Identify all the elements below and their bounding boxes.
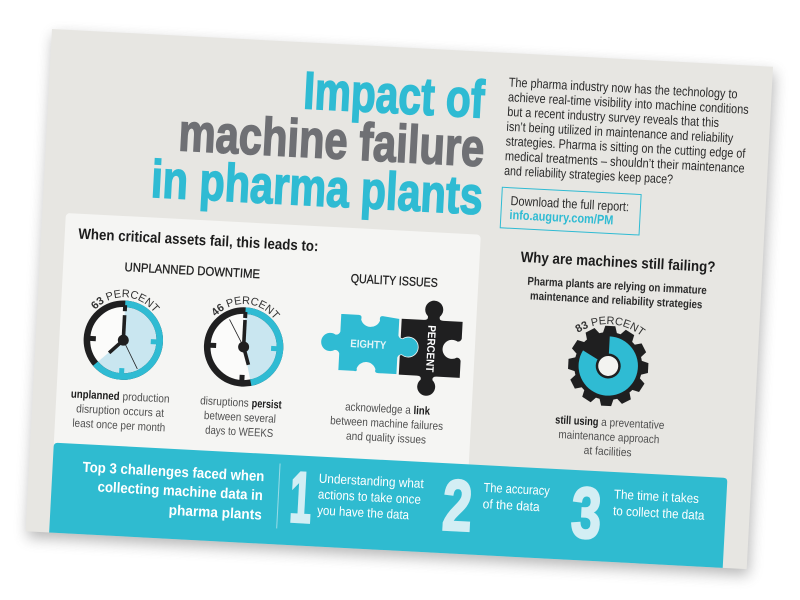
- challenge 1: actions to take once: [318, 487, 421, 507]
- caption: 46 percent: days to WEEKS: [205, 425, 274, 440]
- subheading: immature strategies: Pharma plants are relying on immature: [527, 276, 707, 297]
- challenges heading: collecting machine data in: [97, 480, 263, 504]
- panel: top 3 challenges: [49, 443, 727, 568]
- label: 63 percent: 63 PERCENT: [91, 290, 160, 311]
- caption: 63 percent: unplanned: [71, 388, 120, 403]
- challenges heading: [80, 460, 265, 524]
- intro paragraph: and reliability strategies keep pace?: [504, 163, 673, 187]
- subheading: immature strategies: [526, 276, 707, 312]
- title: Impact of: [302, 61, 486, 130]
- icon: puzzle 80 percent: [318, 295, 464, 397]
- puzzle label: percent: PERCENT: [423, 325, 437, 373]
- challenge 1: Understanding what: [318, 471, 424, 491]
- intro paragraph: The pharma industry now has the technology to: [508, 74, 738, 101]
- clock: 63 percent: [85, 302, 162, 378]
- subheading: immature strategies: maintenance and reliability strategies: [530, 290, 703, 311]
- caption: puzzle: [329, 401, 444, 447]
- challenge 3: 3: [569, 473, 603, 554]
- challenge 3: [569, 473, 707, 560]
- caption: puzzle: between machine failures: [330, 415, 444, 433]
- caption: gear: maintenance approach: [558, 429, 660, 446]
- label: 83 percent: 83 PERCENT: [575, 316, 646, 334]
- challenge 2: 2: [440, 466, 474, 547]
- caption: 63 percent: disruption occurs at: [76, 403, 165, 420]
- challenge 1: you have the data: [317, 503, 410, 522]
- label: 46 percent: 46 PERCENT: [212, 296, 280, 318]
- download callout: info.augury.com/PM: [509, 207, 614, 227]
- intro paragraph: strategies. Pharma is sitting on the cutting edge of: [505, 133, 746, 161]
- download callout: [500, 187, 641, 235]
- challenge 3: The time it takes: [614, 487, 700, 506]
- challenge 1: 1: [288, 458, 314, 539]
- challenge 1: [288, 458, 425, 545]
- puzzle label: eighty: EIGHTY: [350, 338, 387, 352]
- challenge 2: The accuracy: [483, 480, 551, 498]
- intro paragraph: achieve real-time visibility into machine conditions: [508, 89, 750, 117]
- caption: gear: at facilities: [583, 445, 632, 459]
- heading: quality issues: QUALITY ISSUES: [350, 271, 438, 290]
- intro paragraph: medical treatments – shouldn’t their maintenance: [505, 148, 745, 176]
- panel: critical assets: [54, 213, 480, 464]
- challenges heading: pharma plants: [168, 503, 262, 524]
- caption: 46 percent: persist: [251, 398, 282, 412]
- caption: gear: still using: [555, 414, 599, 429]
- caption: 46 percent: disruptions: [200, 395, 249, 410]
- caption: puzzle: and quality issues: [346, 430, 426, 447]
- title: machine failure: [177, 103, 486, 178]
- panel heading: When critical assets fail, this leads to:: [78, 226, 319, 255]
- caption: 63 percent: [69, 388, 170, 435]
- heading: unplanned downtime: UNPLANNED DOWNTIME: [124, 260, 260, 281]
- caption: gear: [553, 414, 665, 461]
- caption: 63 percent: least once per month: [72, 418, 166, 434]
- caption: puzzle: acknowledge a: [345, 401, 412, 417]
- caption: puzzle: link: [413, 405, 431, 418]
- icon: gear 83 percent: [566, 324, 650, 408]
- caption: gear: a preventative: [601, 417, 665, 432]
- title: [150, 54, 489, 226]
- caption: 46 percent: [198, 395, 282, 440]
- heading: why failing: Why are machines still failing?: [520, 249, 716, 276]
- intro paragraph: isn’t being utilized in maintenance and reliability: [506, 119, 734, 146]
- intro paragraph: but a recent industry survey reveals that this: [507, 104, 720, 130]
- caption: 63 percent: production: [122, 391, 170, 406]
- download callout: Download the full report:: [510, 193, 629, 214]
- challenge 3: to collect the data: [613, 503, 706, 523]
- intro paragraph: [504, 74, 750, 190]
- title: in pharma plants: [150, 150, 484, 226]
- clock: 46 percent: [205, 309, 282, 385]
- challenges heading: Top 3 challenges faced when: [82, 460, 265, 485]
- challenge 2: [440, 466, 551, 551]
- challenge 2: of the data: [482, 496, 541, 514]
- caption: 46 percent: between several: [204, 410, 276, 426]
